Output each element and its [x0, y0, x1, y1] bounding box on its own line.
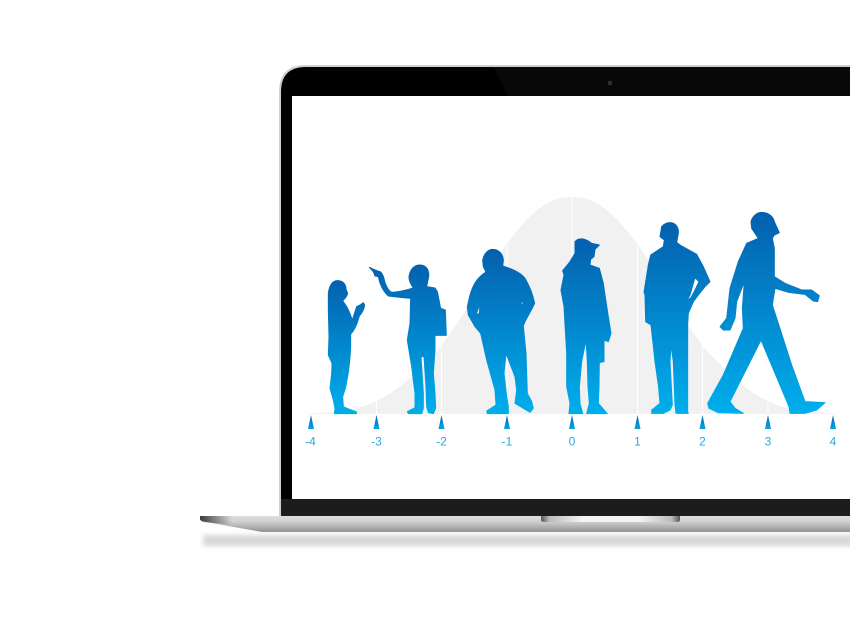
- silhouette: girl gesturing, -4: [328, 281, 365, 414]
- silhouette: person with cap, 0: [561, 239, 611, 414]
- axis labels: 4: [830, 434, 837, 448]
- axis labels: 1: [634, 434, 641, 448]
- laptop base: [200, 516, 850, 532]
- laptop lid and bezel: [279, 65, 850, 516]
- axis labels: 0: [569, 434, 576, 448]
- silhouette: man hand on hip, 1.5: [644, 223, 710, 413]
- silhouette: heavy man, -1: [467, 249, 535, 414]
- camera: [608, 81, 612, 85]
- camera housing: [494, 67, 850, 96]
- hinge notch: [541, 516, 680, 522]
- axis labels: 3: [765, 434, 772, 448]
- axis labels: -1: [502, 434, 513, 448]
- axis labels: [305, 434, 837, 448]
- laptop shadow: [203, 535, 850, 546]
- axis labels: 2: [699, 434, 706, 448]
- lower bezel: [281, 499, 850, 516]
- silhouette: woman pointing with bag, -2: [369, 265, 446, 414]
- axis labels: -4: [305, 434, 316, 448]
- axis tick markers: [308, 415, 836, 429]
- bell curve: [300, 197, 844, 414]
- axis labels: -2: [436, 434, 447, 448]
- screen: [292, 96, 850, 499]
- axis labels: -3: [371, 434, 382, 448]
- silhouette: walking man, 3: [708, 212, 825, 413]
